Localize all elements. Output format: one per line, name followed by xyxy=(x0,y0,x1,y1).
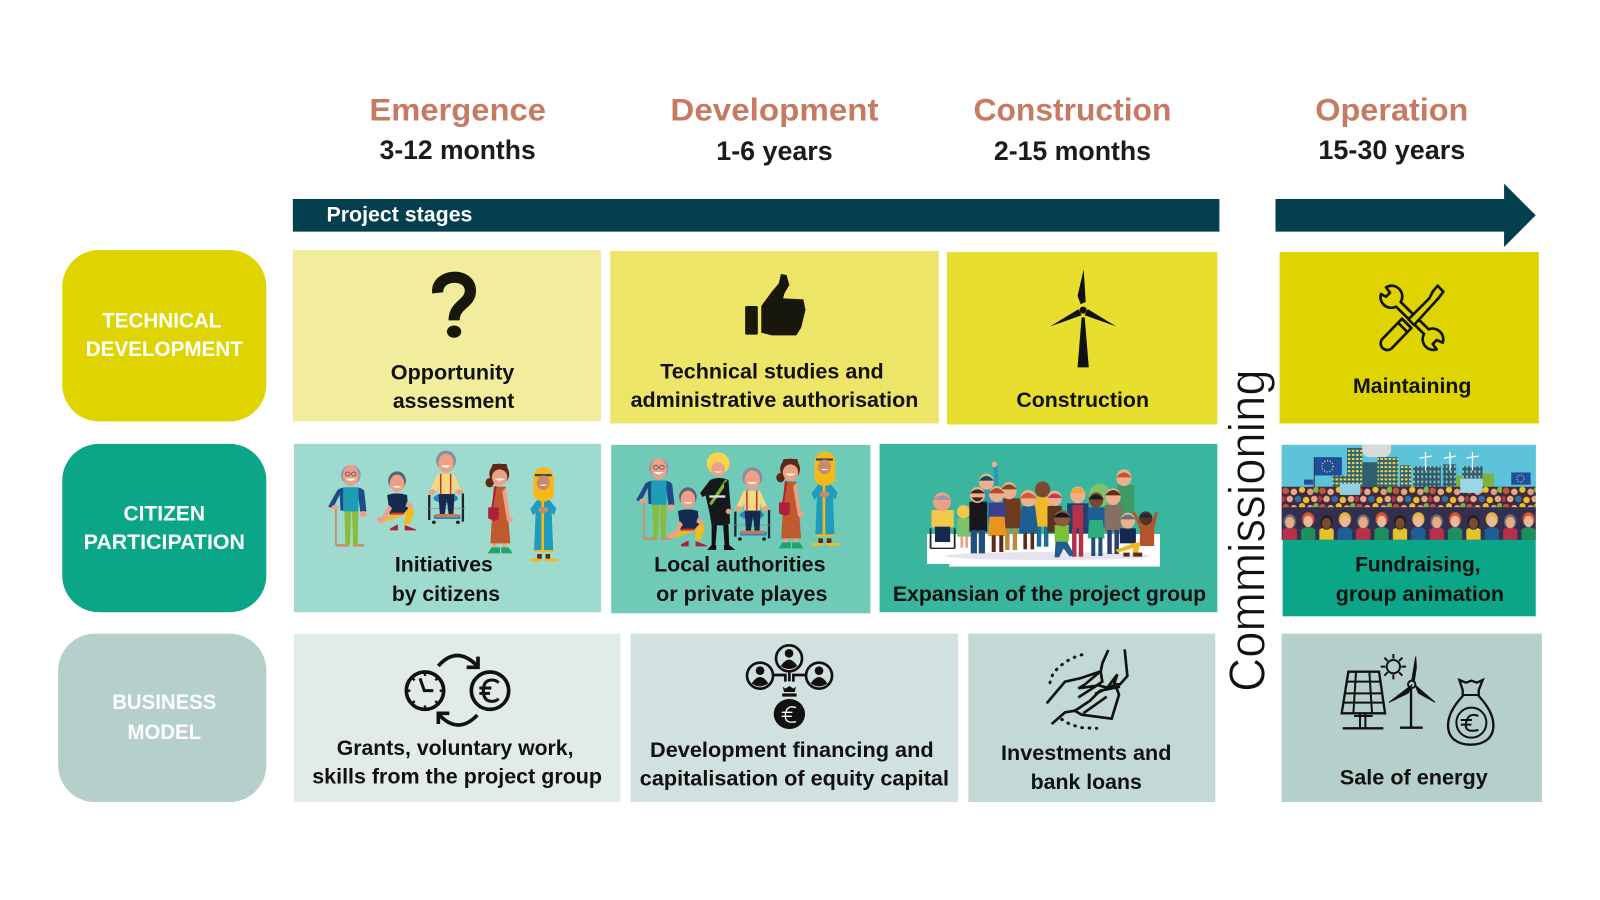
heading: Development xyxy=(670,91,879,166)
heading: Development: 1-6 years xyxy=(716,136,833,166)
icon: clock and euro exchange xyxy=(406,656,509,725)
label: initiatives by citizens: by citizens xyxy=(392,582,500,606)
label: grants xyxy=(312,736,602,789)
label: construction: Construction xyxy=(1016,388,1149,412)
illustration: large group of people xyxy=(927,461,1160,567)
row label: business model: MODEL xyxy=(128,720,201,744)
row label: technical development xyxy=(62,250,266,421)
icon: question mark xyxy=(438,277,470,338)
icon: wrench and screwdriver xyxy=(1381,286,1443,350)
row label: technical development: TECHNICAL xyxy=(102,309,221,333)
panel: grants xyxy=(294,634,620,802)
heading: Emergence: 3-12 months xyxy=(380,135,536,165)
heading: Construction: 2-15 months xyxy=(994,136,1151,166)
label: grants: Grants, voluntary work, xyxy=(337,736,573,760)
icon: wind turbine xyxy=(1050,269,1116,367)
label: opportunity assessment: Opportunity xyxy=(391,361,514,385)
heading: Construction xyxy=(973,91,1171,166)
icon: solar panel, turbine and money bag xyxy=(1342,654,1493,745)
arrow: project stages bar xyxy=(293,199,1219,232)
label: investments xyxy=(1001,741,1171,794)
arrow: operation stage arrow xyxy=(1276,184,1536,247)
label: sale of energy: Sale of energy xyxy=(1340,766,1488,790)
label: investments: Investments and xyxy=(1001,741,1171,765)
panel: technical studies xyxy=(610,251,939,423)
heading: Emergence: Emergence xyxy=(369,91,546,127)
label: opportunity assessment xyxy=(391,361,514,413)
row label: business model: BUSINESS xyxy=(112,690,216,714)
label: local authorities: or private playes xyxy=(656,582,828,606)
heading: Emergence xyxy=(369,91,546,165)
panel: construction xyxy=(947,252,1217,424)
label: local authorities xyxy=(654,552,828,606)
panel: local authorities xyxy=(611,445,870,613)
label: local authorities: Local authorities xyxy=(654,552,826,576)
panel: initiatives by citizens xyxy=(294,444,601,612)
label: fundraising: Fundraising, xyxy=(1355,552,1481,576)
label: fundraising: group animation xyxy=(1336,582,1504,606)
panel: opportunity assessment xyxy=(293,250,601,421)
row label: citizen participation: PARTICIPATION xyxy=(84,530,245,554)
label: technical studies: Technical studies and xyxy=(660,360,884,384)
row label: business model xyxy=(58,634,266,802)
label: fundraising xyxy=(1336,552,1504,606)
label: maintaining: Maintaining xyxy=(1353,374,1471,398)
panel: investments xyxy=(968,634,1215,802)
icon: thumbs up xyxy=(745,274,805,335)
panel: sale of energy xyxy=(1282,634,1542,802)
panel: expansion of the project group xyxy=(880,444,1217,612)
label: initiatives by citizens: Initiatives xyxy=(395,552,493,576)
heading: Operation: Operation xyxy=(1315,91,1468,127)
heading: Development: Development xyxy=(670,91,879,127)
heading: Operation xyxy=(1315,91,1468,165)
panel: fundraising xyxy=(1282,445,1536,616)
icon: hands exchanging money xyxy=(1047,649,1127,728)
illustration: crowd with city and flags xyxy=(1282,445,1536,540)
label: technical studies xyxy=(631,360,918,412)
panel: development financing xyxy=(631,634,958,802)
label: opportunity assessment: assessment xyxy=(393,389,514,413)
row label: technical development: DEVELOPMENT xyxy=(86,337,243,361)
heading: Construction: Construction xyxy=(973,91,1171,127)
icon: people and money bag xyxy=(747,645,832,729)
label: commissioning milestone: Commissioning xyxy=(1218,369,1275,692)
heading: Operation: 15-30 years xyxy=(1318,135,1465,165)
label: development financing: Development financing and xyxy=(650,738,934,762)
label: development financing xyxy=(640,738,949,791)
label: development financing: capitalisation of equity capital xyxy=(640,767,949,791)
row label: citizen participation: CITIZEN xyxy=(123,501,205,525)
illustration: five citizens xyxy=(328,451,558,561)
arrow: project stages bar: Project stages xyxy=(327,202,473,226)
illustration: six people xyxy=(636,452,839,550)
label: investments: bank loans xyxy=(1031,770,1142,794)
label: grants: skills from the project group xyxy=(312,765,602,789)
label: initiatives by citizens xyxy=(392,552,500,606)
panel: maintaining xyxy=(1280,252,1539,423)
label: technical studies: administrative authorisation xyxy=(631,388,918,412)
label: expansion: Expansian of the project group xyxy=(893,582,1206,606)
row label: citizen participation xyxy=(62,444,266,612)
